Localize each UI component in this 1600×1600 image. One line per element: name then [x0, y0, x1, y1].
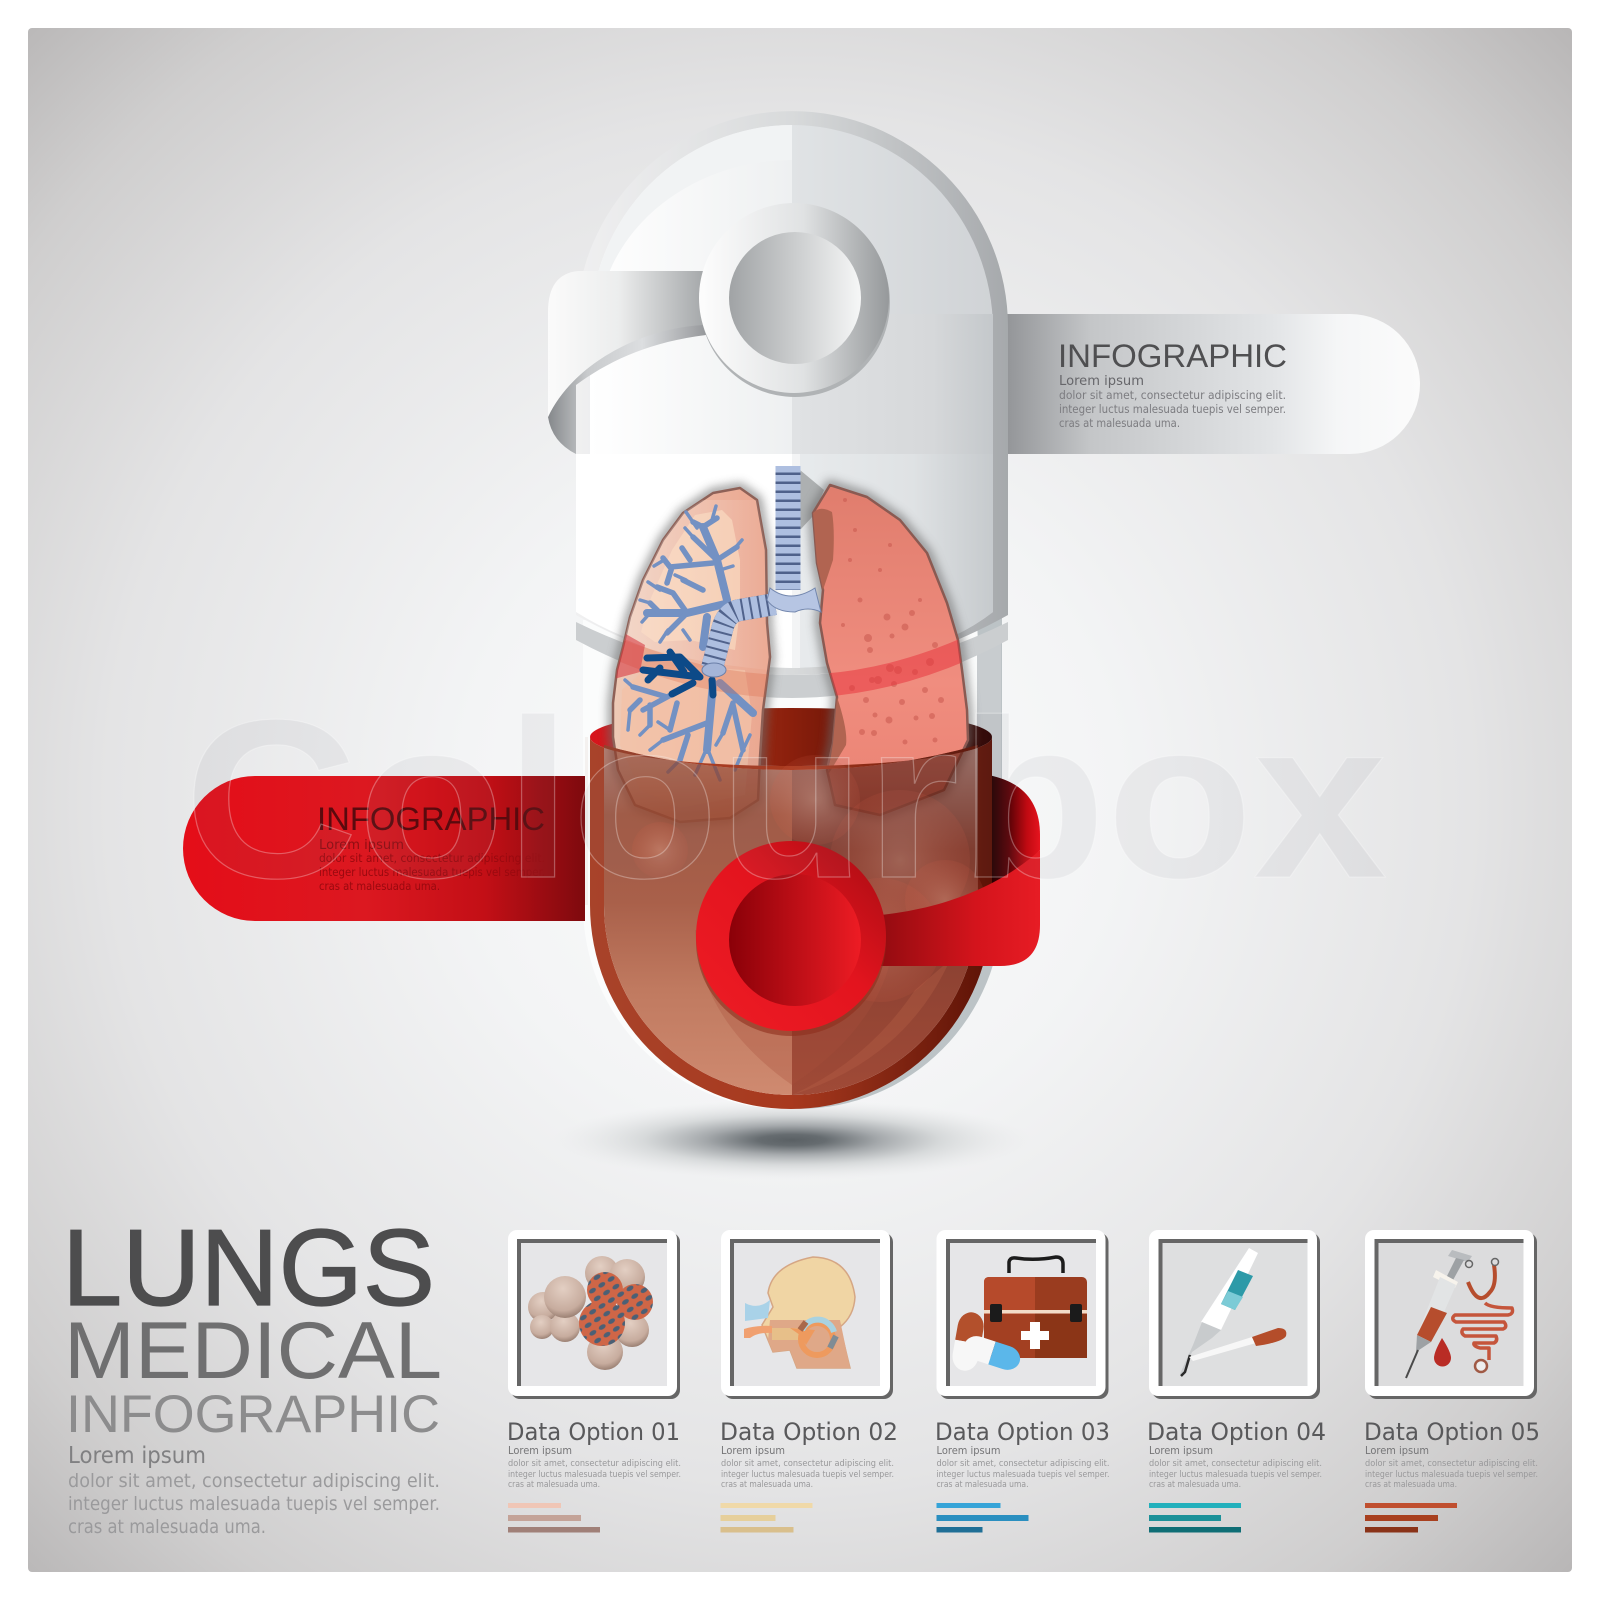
card 1: alveoli: [507, 1230, 681, 1532]
left red tab: [183, 776, 585, 921]
right lung dark lobe: [813, 509, 834, 590]
upper capsule cap: [576, 111, 1008, 698]
icon: thermometer and dropper: [1180, 1248, 1286, 1376]
option 2 text: integer luctus malesuada tuepis vel semper.: [721, 1470, 894, 1480]
option 3 text: Lorem ipsum: [936, 1444, 1000, 1457]
cap band tint over right lung: [830, 640, 961, 696]
option 2 text: Lorem ipsum: [721, 1444, 785, 1457]
option 1 text: integer luctus malesuada tuepis vel semper.: [508, 1470, 681, 1480]
option 2 bars: [720, 1503, 812, 1532]
option 3 heading: Data Option 03: [935, 1418, 1110, 1446]
floor shadow: [552, 1100, 1032, 1180]
option 5 text: [1365, 1444, 1538, 1490]
white rim line: [585, 737, 588, 905]
main title block: [62, 1207, 442, 1538]
card 3: first aid kit: [935, 1230, 1110, 1532]
right tab body text: cras at malesuada uma.: [1059, 416, 1180, 430]
trachea and bronchi: [702, 466, 821, 677]
title LUNGS: LUNGS: [62, 1207, 435, 1329]
grey ring badge: [699, 203, 890, 397]
left tab body text: integer luctus malesuada tuepis vel semper.: [319, 865, 545, 879]
left tab body text: cras at malesuada uma.: [319, 879, 440, 893]
card 5: syringe: [1364, 1230, 1540, 1532]
right tab heading: INFOGRAPHIC: [1058, 338, 1287, 374]
lung soft shadow: [613, 485, 968, 822]
option 4 text: integer luctus malesuada tuepis vel semper.: [1149, 1470, 1322, 1480]
right tab body text: [1059, 388, 1286, 430]
card 4: thermometer: [1147, 1230, 1326, 1532]
left lung inner: [641, 510, 740, 650]
bronchial tree dark section: [643, 652, 713, 695]
right lung spots: [841, 498, 944, 744]
red ring centre: [729, 874, 861, 1006]
option 3 text: dolor sit amet, consectetur adipiscing elit.: [936, 1459, 1110, 1469]
left tab body text: [319, 851, 545, 893]
option 5 bars: [1365, 1503, 1457, 1532]
bronchial tree: [625, 506, 753, 780]
liquid back opening: [590, 708, 992, 766]
liquid inner shield: [695, 930, 895, 1085]
option 3 text: [936, 1444, 1110, 1490]
title body text: [68, 1470, 440, 1538]
red ring badge: [696, 841, 886, 1036]
option 1 text: Lorem ipsum: [508, 1444, 572, 1457]
left lung: [613, 488, 770, 822]
title body text: cras at malesuada uma.: [68, 1516, 266, 1538]
option 1 bars: [508, 1503, 600, 1532]
option 4 text: Lorem ipsum: [1149, 1444, 1213, 1457]
right tab subheading: Lorem ipsum: [1059, 373, 1144, 389]
title body text: integer luctus malesuada tuepis vel semper.: [68, 1493, 440, 1515]
icon: first aid kit and pills: [950, 1257, 1087, 1373]
option 3 bars: [936, 1503, 1028, 1532]
right grey tab: [1000, 314, 1420, 454]
option 4 text: [1149, 1444, 1322, 1490]
grey ribbon front: [548, 271, 704, 417]
liquid bubbles: [632, 755, 985, 1002]
cap band tint over left lung: [616, 634, 768, 697]
card 2: head: [720, 1230, 898, 1532]
option 2 heading: Data Option 02: [720, 1418, 898, 1446]
option 3 text: integer luctus malesuada tuepis vel semper.: [936, 1470, 1110, 1480]
option 1 heading: Data Option 01: [507, 1418, 680, 1446]
title INFOGRAPHIC: INFOGRAPHIC: [66, 1385, 440, 1444]
lower capsule shell: [583, 610, 1002, 1109]
option 1 text: cras at malesuada uma.: [508, 1480, 600, 1490]
left lung pale veil: [624, 500, 768, 668]
option 2 text: cras at malesuada uma.: [721, 1480, 813, 1490]
grey band under cap: [576, 622, 1008, 698]
option 2 text: dolor sit amet, consectetur adipiscing elit.: [721, 1459, 894, 1469]
red ribbon back: [988, 775, 1040, 892]
left tab body text: dolor sit amet, consectetur adipiscing elit.: [319, 851, 545, 865]
grey ring centre: [729, 232, 861, 364]
trachea cast shadow: [800, 470, 824, 530]
option 5 heading: Data Option 05: [1364, 1418, 1540, 1446]
icon: head profile with airways: [744, 1257, 855, 1368]
icon: syringe, stethoscope and intestine: [1406, 1250, 1512, 1378]
lungs: [602, 466, 978, 824]
option 5 text: integer luctus malesuada tuepis vel semper.: [1365, 1470, 1538, 1480]
option 5 text: Lorem ipsum: [1365, 1444, 1429, 1457]
grey ribbon back curl: [548, 322, 706, 454]
right lung: [813, 485, 968, 815]
option 1 text: dolor sit amet, consectetur adipiscing elit.: [508, 1459, 681, 1469]
option 2 text: [721, 1444, 894, 1490]
right tab body text: integer luctus malesuada tuepis vel semper.: [1059, 402, 1286, 416]
left tab heading: INFOGRAPHIC: [317, 801, 545, 837]
option 4 heading: Data Option 04: [1147, 1418, 1326, 1446]
option 4 text: cras at malesuada uma.: [1149, 1480, 1241, 1490]
title body text: dolor sit amet, consectetur adipiscing elit.: [68, 1470, 440, 1492]
liquid in lower capsule: [586, 737, 992, 1109]
option 4 text: dolor sit amet, consectetur adipiscing elit.: [1149, 1459, 1322, 1469]
option 1 text: [508, 1444, 681, 1490]
left tab subheading: Lorem ipsum: [319, 837, 404, 853]
title MEDICAL: MEDICAL: [64, 1306, 442, 1396]
option 3 text: cras at malesuada uma.: [936, 1480, 1028, 1490]
option 5 text: dolor sit amet, consectetur adipiscing elit.: [1365, 1459, 1538, 1469]
red ribbon front: [880, 850, 1040, 966]
option 4 bars: [1149, 1503, 1241, 1532]
icon: alveoli cluster: [528, 1256, 653, 1370]
watermark: Colourbox: [184, 672, 1387, 925]
title subheading: Lorem ipsum: [68, 1443, 206, 1469]
right tab body text: dolor sit amet, consectetur adipiscing elit.: [1059, 388, 1286, 402]
option 5 text: cras at malesuada uma.: [1365, 1480, 1457, 1490]
